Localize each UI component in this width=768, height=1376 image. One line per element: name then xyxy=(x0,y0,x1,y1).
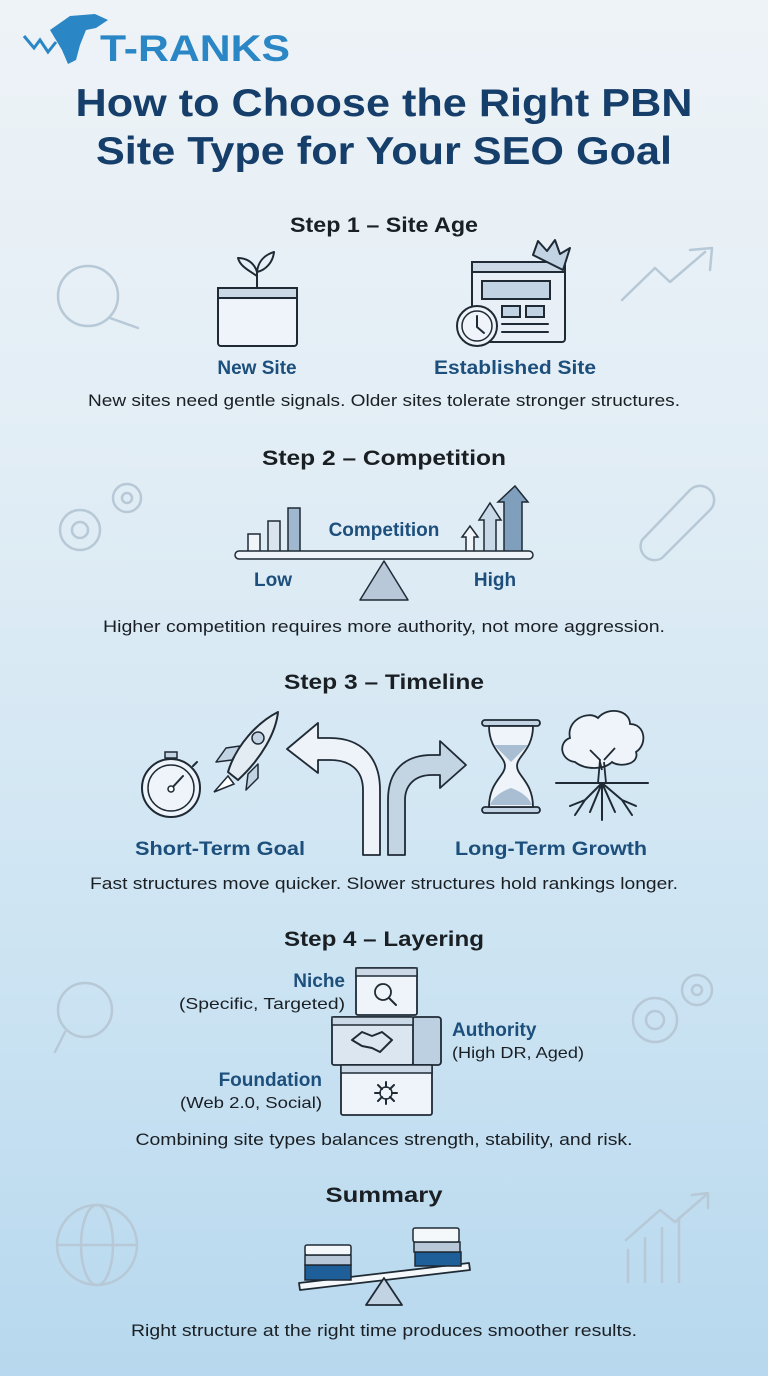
label: high: High xyxy=(474,570,516,591)
label: niche: Niche xyxy=(293,971,345,992)
icon: rocket xyxy=(214,712,278,792)
step 1 heading: Step 1 – Site Age xyxy=(290,214,478,237)
logo mark xyxy=(24,14,108,64)
label: low: Low xyxy=(254,570,292,591)
icon: hourglass xyxy=(482,720,540,813)
step 4 heading: Step 4 – Layering xyxy=(284,928,484,951)
icon: new site xyxy=(218,252,297,346)
chart: competition scale xyxy=(235,486,533,600)
logo text: T-RANKS xyxy=(100,28,290,69)
label: niche xyxy=(179,971,345,1013)
step 2 heading: Step 2 – Competition xyxy=(262,447,506,470)
arrow: fork left and right xyxy=(287,723,466,855)
icon: balanced seesaw xyxy=(299,1228,470,1305)
label: authority: Authority xyxy=(452,1020,537,1041)
summary description: Right structure at the right time produces smoother results. xyxy=(131,1322,637,1340)
icon: tree with roots xyxy=(556,711,648,820)
label: long-term growth: Long-Term Growth xyxy=(455,839,647,860)
icon: established site xyxy=(457,240,570,346)
label: foundation: Foundation xyxy=(219,1070,322,1091)
logo xyxy=(24,14,290,69)
step 1 description: New sites need gentle signals. Older sites tolerate stronger structures. xyxy=(88,392,680,410)
diagram: layered site stack xyxy=(179,968,584,1115)
label: foundation xyxy=(180,1070,322,1112)
title xyxy=(76,82,692,173)
label: short-term goal: Short-Term Goal xyxy=(135,839,305,860)
title: Site Type for Your SEO Goal xyxy=(96,130,672,173)
label: new site: New Site xyxy=(217,358,297,379)
step 4 description: Combining site types balances strength, stability, and risk. xyxy=(136,1131,632,1149)
label: authority xyxy=(452,1020,584,1062)
label: authority: (High DR, Aged) xyxy=(452,1045,584,1062)
label: foundation: (Web 2.0, Social) xyxy=(180,1095,322,1112)
decorative background icons xyxy=(55,248,714,1285)
step 2 description: Higher competition requires more authority, not more aggression. xyxy=(103,618,665,636)
layer: niche xyxy=(356,968,417,1015)
title: How to Choose the Right PBN xyxy=(76,82,692,125)
label: niche: (Specific, Targeted) xyxy=(179,996,345,1013)
label: established site: Established Site xyxy=(434,358,596,379)
step 3 description: Fast structures move quicker. Slower structures hold rankings longer. xyxy=(90,875,678,893)
summary heading: Summary xyxy=(326,1184,443,1207)
label: competition: Competition xyxy=(329,520,439,541)
layer: foundation xyxy=(341,1065,432,1115)
icon: stopwatch xyxy=(142,752,200,817)
layer: authority xyxy=(332,1017,441,1065)
step 3 heading: Step 3 – Timeline xyxy=(284,671,484,694)
